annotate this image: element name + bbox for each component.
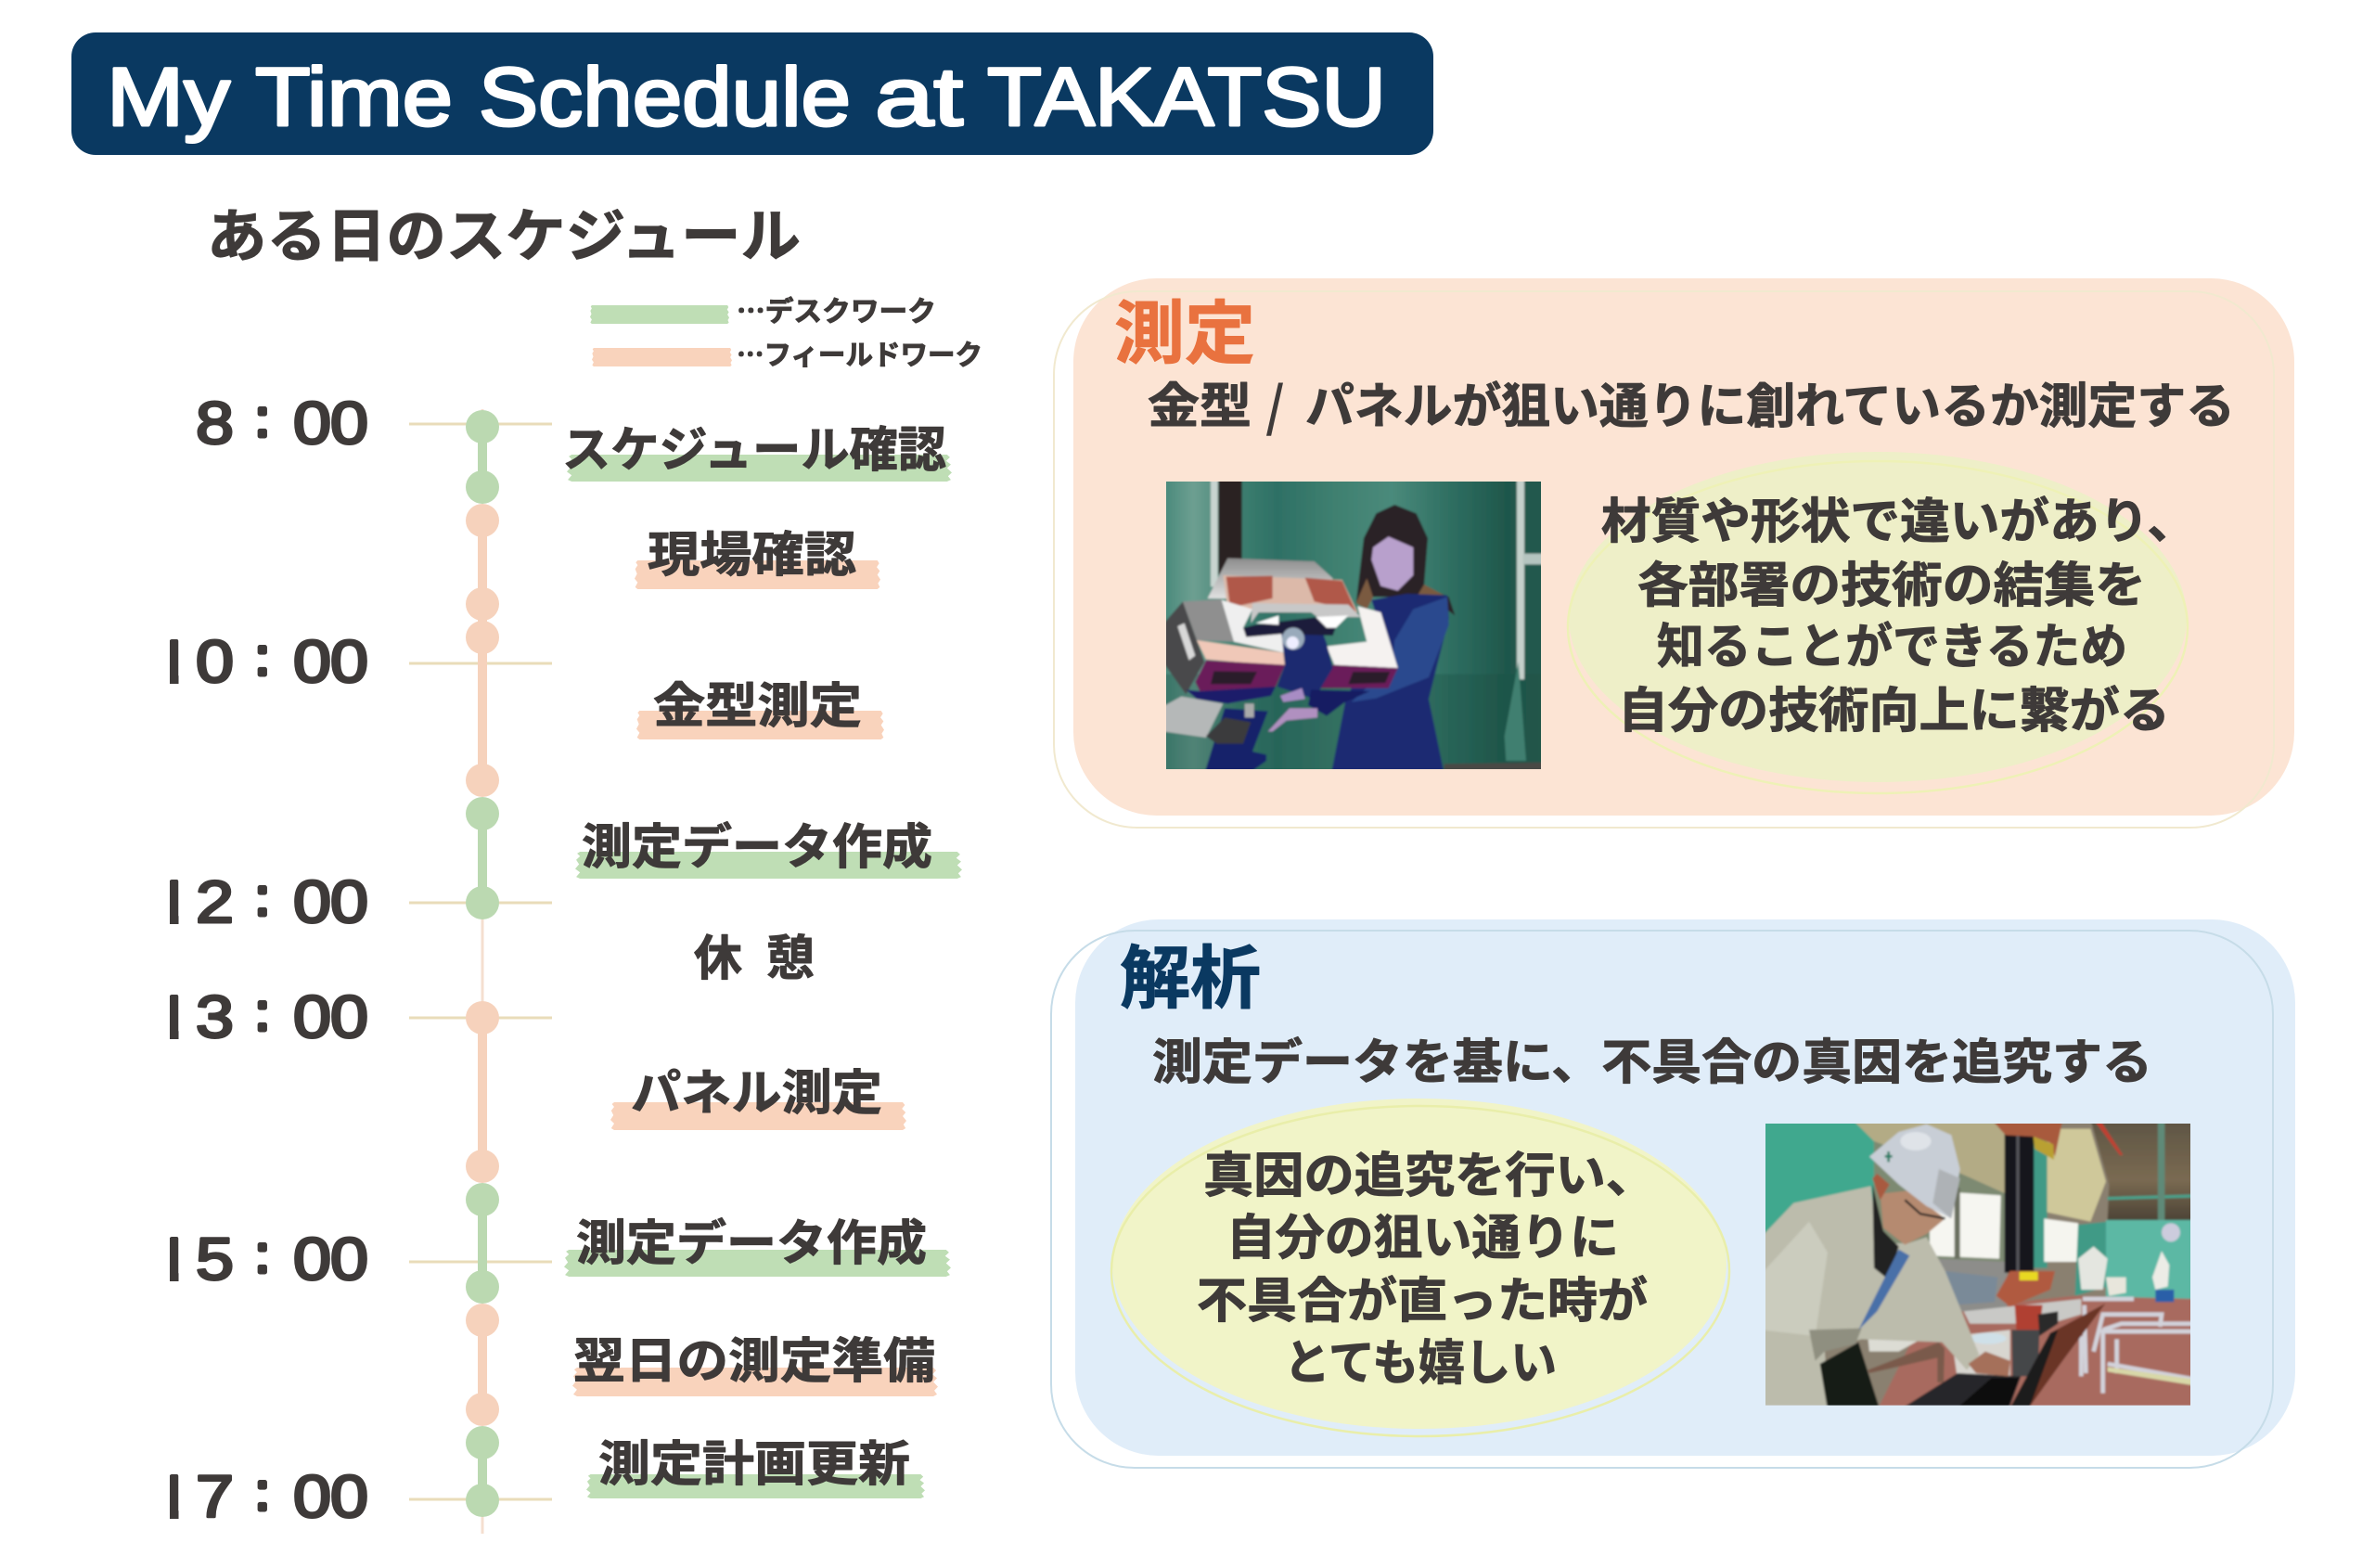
item: panel measurement: パネル測定 [631, 1067, 882, 1121]
bubble: analysis comment: とても嬉しい [1284, 1337, 1557, 1391]
title: My [107, 50, 231, 143]
bubble: analysis comment: 真因の追究を行い、 [1203, 1150, 1656, 1203]
time label: 15:00: 5 [196, 1226, 234, 1292]
time label: 17:00 [170, 1473, 367, 1519]
time label: 15:00: 0 [293, 1226, 331, 1292]
time label: 17:00: 0 [293, 1463, 331, 1530]
legend: field work [592, 332, 982, 373]
time label: 12:00: 0 [293, 868, 331, 935]
panel: measurement [1054, 278, 2294, 828]
subtitle: measurement [1148, 369, 2235, 451]
time label: 10:00: 0 [293, 628, 331, 695]
time label: 17:00: 0 [330, 1463, 368, 1530]
item: die measurement: 金型測定 [653, 680, 862, 734]
time label: 13:00: : [255, 983, 270, 1041]
time label: 12:00: 1 [156, 868, 189, 935]
time label: 10:00: 0 [196, 628, 234, 695]
panel: analysis [1051, 919, 2295, 1468]
bubble: measurement comment: 自分の技術向上に繋がる [1618, 685, 2170, 739]
time label: 17:00: 1 [156, 1463, 189, 1530]
time label: 8:00: 0 [330, 390, 368, 456]
time label: 13:00: 1 [156, 983, 189, 1050]
time label: 15:00 [170, 1236, 367, 1281]
item: next day preparation: 翌日の測定準備 [573, 1335, 935, 1389]
subtitle: measurement: 金型 [1148, 380, 1252, 434]
title: TAKATSU [987, 50, 1386, 143]
time label: 10:00: 0 [330, 628, 368, 695]
time label: 13:00 [170, 995, 367, 1039]
subtitle: measurement: / [1266, 369, 1283, 451]
bubble: analysis comment: 不具合が直った時が [1197, 1275, 1648, 1329]
bubble: measurement comment: 各部署の技術の結集を [1637, 559, 2146, 613]
title: Schedule [479, 50, 851, 143]
time label: 15:00: 0 [330, 1226, 368, 1292]
bubble: analysis comment [1111, 1099, 1729, 1436]
time label: 17:00: 7 [196, 1463, 234, 1530]
item: schedule check: スケジュール確認 [562, 424, 946, 478]
item: break: 休 憩 [694, 932, 815, 986]
legend: desk work: …デスクワーク [737, 289, 936, 329]
legend: desk work [590, 289, 936, 329]
time label: 10:00 [170, 638, 367, 684]
item: plan update: 測定計画更新 [598, 1438, 910, 1492]
time label: 12:00: : [255, 868, 270, 926]
time label: 10:00: 1 [156, 628, 189, 695]
bubble: measurement comment [1568, 452, 2197, 793]
title: Time [255, 50, 453, 143]
time label: 12:00 [170, 880, 367, 924]
time label: 13:00: 0 [330, 983, 368, 1050]
time label: 15:00: : [255, 1225, 270, 1283]
time label: 10:00: : [255, 627, 270, 686]
heading: measurement: 測定 [1114, 295, 1255, 372]
item: panel measurement [610, 1067, 906, 1130]
photo: engineer at laptop in factory [1761, 1120, 2194, 1410]
time label: 8:00: 8 [196, 390, 234, 456]
heading: schedule: ある日のスケジュール [207, 205, 801, 269]
bubble: measurement comment: 知ることができるため [1657, 621, 2127, 675]
item: site check: 現場確認 [648, 529, 856, 583]
title: at [875, 50, 963, 143]
time label: 13:00: 3 [196, 983, 234, 1050]
legend [590, 289, 982, 373]
timeline [409, 409, 552, 1534]
legend: field work: …フィールドワーク [737, 332, 982, 373]
time label: 8:00: : [255, 389, 270, 447]
time label: 12:00: 0 [330, 868, 368, 935]
item: data creation 2: 測定データ作成 [576, 1217, 927, 1271]
time label: 8:00: 0 [293, 390, 331, 456]
photo: woman with 3D scanner [1162, 478, 1545, 773]
heading: analysis: 解析 [1120, 940, 1261, 1017]
title [71, 32, 1433, 155]
bubble: analysis comment: 自分の狙い通りに [1226, 1212, 1619, 1266]
time label: 8:00 [196, 389, 368, 456]
time label: 15:00: 1 [156, 1226, 189, 1292]
time label: 13:00: 0 [293, 983, 331, 1050]
time label: 17:00: : [255, 1462, 270, 1521]
subtitle: measurement: パネルが狙い通りに創れているか測定する [1305, 380, 2235, 434]
item: data creation: 測定データ作成 [582, 821, 932, 875]
bubble: measurement comment: 材質や形状で違いがあり、 [1601, 495, 2197, 549]
time label: 12:00: 2 [196, 868, 234, 935]
subtitle: analysis: 測定データを基に、不具合の真因を追究する [1152, 1036, 2152, 1090]
